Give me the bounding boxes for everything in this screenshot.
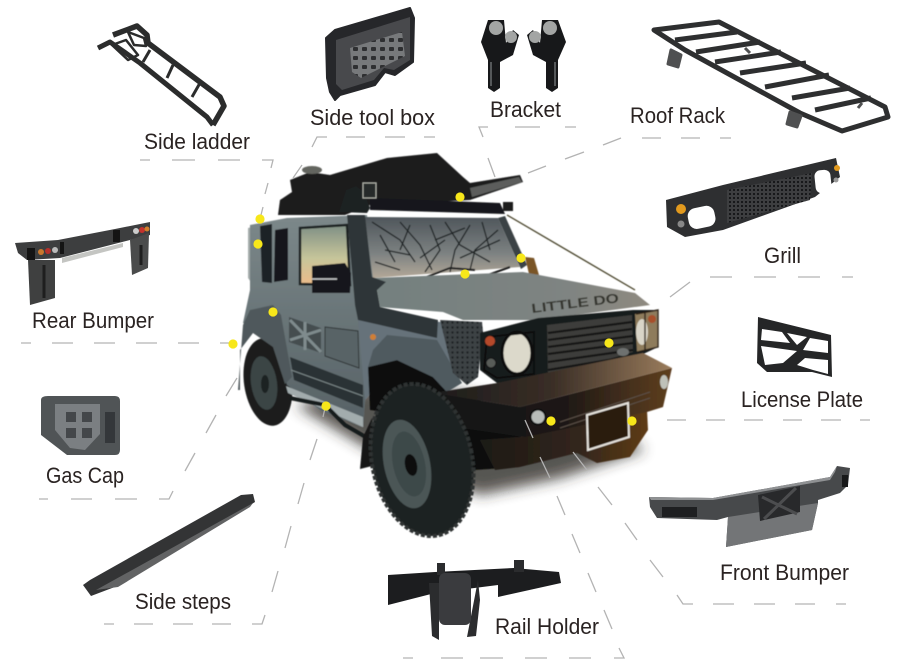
marker: bracket	[516, 253, 526, 263]
bumper front face	[433, 368, 672, 437]
part: front bumper	[649, 466, 850, 547]
right headlight and cage	[635, 310, 658, 352]
rear wheel	[238, 335, 298, 429]
marker: gas cap	[268, 307, 278, 317]
part: rear bumper	[15, 222, 150, 305]
marker: grill	[604, 338, 614, 348]
leader: bracket	[479, 127, 576, 177]
lower valance	[480, 410, 648, 470]
part: grill	[666, 158, 840, 237]
far mirror	[525, 257, 539, 275]
leader: roof rack	[528, 138, 731, 173]
part: license plate	[757, 317, 832, 377]
roof cargo	[278, 153, 523, 215]
windshield	[365, 217, 520, 278]
leader: front bumper	[573, 452, 846, 604]
small lamp	[486, 358, 496, 368]
side step	[286, 386, 363, 427]
label: roof rack: Roof Rack	[630, 103, 726, 128]
marker: roof rack	[455, 192, 465, 202]
marker: tool box	[253, 239, 263, 249]
part: side tool box	[326, 8, 414, 100]
turn signal	[485, 336, 495, 346]
part: rail holder	[388, 560, 561, 640]
rear fender	[238, 305, 292, 390]
leader: rail holder	[403, 420, 624, 658]
front fender	[368, 335, 462, 392]
part: side ladder	[98, 26, 224, 125]
part: bracket	[481, 20, 566, 92]
a pillar	[498, 216, 527, 269]
leader: grill	[670, 277, 853, 297]
leader: rear bumper	[21, 342, 229, 344]
step tube	[290, 398, 364, 436]
label: side ladder: Side ladder	[144, 129, 250, 154]
label: bracket: Bracket	[490, 97, 561, 122]
rear ladder panel	[260, 224, 272, 283]
label: rail holder: Rail Holder	[495, 614, 599, 639]
rack feet	[668, 48, 862, 127]
snorkel head	[339, 186, 370, 213]
snorkel pipe	[347, 215, 438, 338]
fog lamp right	[660, 375, 668, 389]
label: license plate: License Plate	[741, 387, 863, 412]
leader: side tool box	[293, 137, 435, 178]
marker: rear bumper	[228, 339, 238, 349]
leader: side ladder	[140, 160, 273, 215]
union jack decal	[289, 317, 321, 353]
label: side tool box: Side tool box	[310, 105, 435, 130]
part: gas cap	[41, 396, 120, 455]
mirror highlight	[312, 278, 337, 280]
marker: side steps	[321, 401, 331, 411]
ground shadow	[295, 380, 645, 495]
wipers	[416, 267, 510, 281]
label: grill: Grill	[764, 243, 801, 268]
licence plate	[587, 403, 629, 450]
left headlight	[502, 332, 532, 374]
headlight cage	[484, 332, 534, 378]
work light	[503, 202, 513, 211]
side marker lamp	[370, 334, 376, 340]
hood	[373, 272, 650, 320]
vehicle photo	[238, 153, 672, 546]
badge	[617, 348, 629, 356]
front fascia	[480, 310, 658, 383]
rear door and spare carrier	[248, 222, 276, 295]
mud flap	[360, 418, 376, 469]
dashed leader lines	[21, 127, 870, 658]
antenna wire	[507, 215, 635, 290]
roof rack bar	[370, 198, 505, 214]
leader: license plate	[667, 419, 870, 421]
location markers	[228, 192, 637, 426]
part: roof rack	[654, 22, 888, 131]
leader: gas cap	[39, 378, 237, 499]
marker: license plate	[627, 416, 637, 426]
rear quarter window	[274, 228, 288, 282]
windshield tree reflections	[372, 222, 500, 272]
fog lamp left	[530, 410, 546, 424]
leader: side steps	[104, 408, 325, 624]
roof light	[363, 183, 376, 198]
label: gas cap: Gas Cap	[46, 463, 124, 488]
label: front bumper: Front Bumper	[720, 560, 849, 585]
side window	[300, 225, 350, 285]
lower stripe	[291, 370, 363, 396]
bumper top surface	[433, 353, 672, 407]
bumper stripes	[560, 392, 650, 428]
front wheel arch	[368, 360, 525, 470]
awning highlight	[470, 177, 522, 197]
hood lettering: LITTLE DO	[531, 290, 620, 316]
cargo rack dome	[302, 166, 322, 174]
marker: ladder	[255, 214, 265, 224]
part: side steps	[83, 494, 255, 596]
mesh fender guard	[440, 320, 483, 385]
marker: bonnet	[460, 269, 470, 279]
marker: rail holder	[546, 416, 556, 426]
side sticker	[325, 327, 359, 368]
front wheel	[357, 374, 487, 546]
grille	[547, 315, 633, 377]
body side	[243, 215, 378, 427]
front quarter body	[358, 318, 458, 400]
door mirror	[312, 263, 351, 293]
label: side steps: Side steps	[135, 589, 231, 614]
label: rear bumper: Rear Bumper	[32, 308, 154, 333]
door lower panel	[290, 357, 363, 408]
